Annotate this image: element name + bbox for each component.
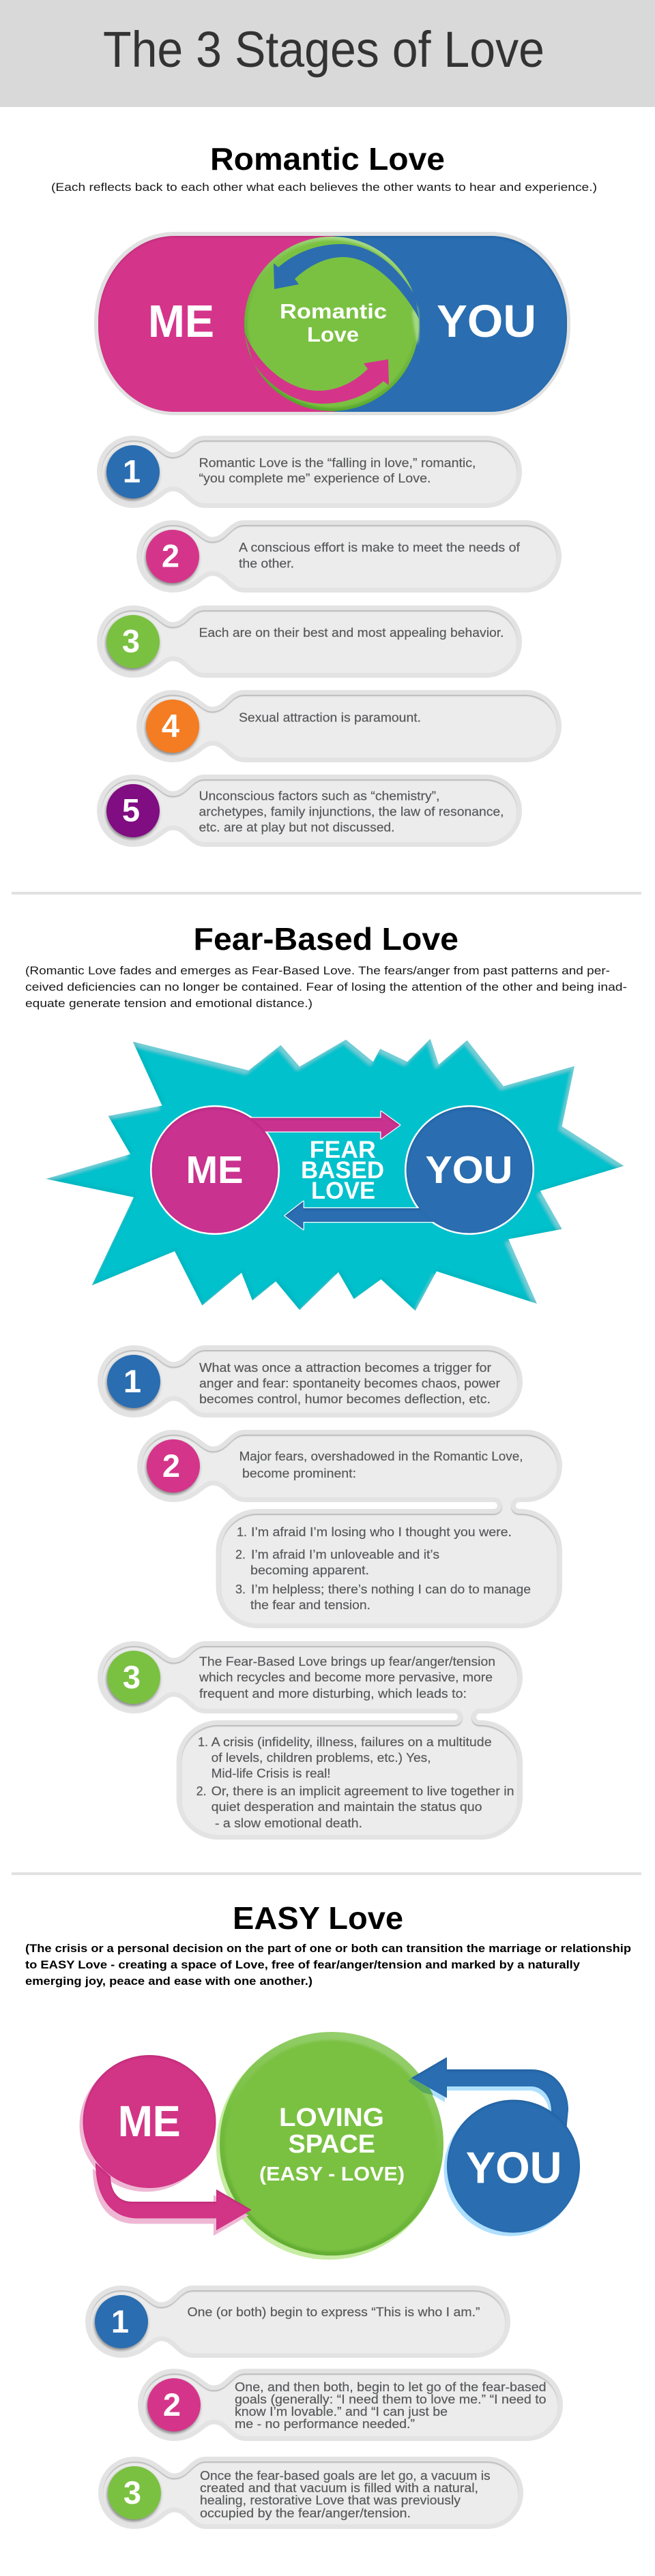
numbered list of outcomes: of levels, children problems, etc.) Yes, (212, 1751, 431, 1765)
item 4: Romantic Love: 4 (162, 708, 179, 743)
item 2: EASY Love: 2 (163, 2386, 181, 2423)
numbered list of fears: becoming apparent. (250, 1563, 369, 1577)
item 3: EASY Love: healing, restorative Love that was previously (200, 2493, 461, 2507)
circle and arrow: ME (79, 2055, 252, 2236)
item 1: EASY Love: One (or both) begin to express “This is who I am.” (187, 2305, 480, 2319)
item 1: Fear-Based Love: becomes control, humor becomes deflection, etc. (199, 1392, 491, 1406)
item 1: Romantic Love: 1 (123, 453, 141, 490)
arrow: pink curved (244, 331, 389, 404)
arrow: me to you (150, 1105, 400, 1235)
item 3: EASY Love: 3 (123, 2474, 141, 2511)
subtitle: Fear-Based Love (25, 964, 627, 1010)
item 3: Fear-Based Love with list: The Fear-Based Love brings up fear/anger/tension (199, 1655, 495, 1668)
item 5: Romantic Love: 5 (122, 792, 140, 828)
circle: loving space (216, 2032, 443, 2260)
diagram: Fear-Based starburst (46, 1039, 624, 1311)
item 3: EASY Love: occupied by the fear/anger/tension. (200, 2506, 411, 2520)
subtitle: EASY Love: to EASY Love - creating a space of Love, free of fear/anger/tension and marked by a naturally (25, 1958, 581, 1971)
numbered list of fears: I’m afraid I’m losing who I thought you were. (251, 1525, 512, 1539)
item 3: Romantic Love (102, 610, 517, 673)
label: Romantic Love centre: Romantic (280, 299, 387, 323)
item 2: Fear-Based Love with list: Major fears, overshadowed in the Romantic Love, (239, 1450, 523, 1463)
item 1: EASY Love: 1 (111, 2303, 129, 2339)
numbered list of outcomes: 2. (196, 1784, 207, 1798)
item 3: Fear-Based Love with list: 3 (123, 1659, 141, 1695)
item 1: Fear-Based Love: anger and fear: spontaneity becomes chaos, power (199, 1377, 500, 1390)
label: Romantic Love centre (280, 299, 387, 346)
item 1: Fear-Based Love: 1 (123, 1363, 141, 1399)
numbered list of fears: 2. (235, 1548, 246, 1561)
item 4: Romantic Love: Sexual attraction is paramount. (239, 710, 421, 724)
numbered list of fears (235, 1525, 531, 1612)
numbered list of outcomes: quiet desperation and maintain the status quo (212, 1800, 482, 1814)
circle and arrow: ME: ME (118, 2097, 181, 2146)
arrow: you to me (285, 1105, 534, 1235)
numbered list of outcomes: Mid-life Crisis is real! (212, 1767, 331, 1780)
label: Fear Based Love: BASED (301, 1157, 384, 1184)
numbered list of fears: 3. (235, 1583, 246, 1596)
item 2: Fear-Based Love with list: become prominent: (242, 1467, 356, 1480)
item 2: EASY Love: me - no performance needed.” (235, 2417, 415, 2431)
pill background: me and you halves (98, 236, 567, 412)
subtitle: Fear-Based Love: (Romantic Love fades and emerges as Fear-Based Love. The fears/anger from past patterns and per- (25, 964, 610, 977)
label: YOU: YOU (437, 296, 536, 347)
numbered list of outcomes (196, 1735, 514, 1830)
item 3: EASY Love: Once the fear-based goals are let go, a vacuum is (200, 2469, 491, 2483)
green centre circle (244, 237, 420, 411)
subtitle: Romantic Love: (Each reflects back to each other what each believes the other wants to hear and experience.) (51, 181, 597, 194)
item 2: Fear-Based Love with list: 2 (162, 1448, 180, 1484)
numbered list of outcomes: 1. (198, 1735, 208, 1749)
circle: loving space: SPACE (288, 2130, 375, 2159)
item 1: Romantic Love: “you complete me” experience of Love. (199, 472, 431, 485)
circle: YOU (407, 1107, 532, 1233)
item 5: Romantic Love: archetypes, family injunctions, the law of resonance, (199, 805, 504, 819)
item 2: Romantic Love: 2 (162, 537, 179, 574)
item 5: Romantic Love: etc. are at play but not discussed. (199, 821, 394, 835)
numbered list of fears: I’m helpless; there’s nothing I can do to manage (251, 1583, 531, 1596)
subtitle: Fear-Based Love: ceived deficiencies can no longer be contained. Fear of losing the attention of the other and being inad- (25, 980, 627, 993)
diagram: Romantic Love pill (94, 232, 570, 415)
item 1: EASY Love (90, 2290, 506, 2353)
title banner (0, 0, 655, 107)
subtitle: EASY Love (25, 1942, 631, 1988)
item 3: Fear-Based Love with list (102, 1646, 518, 1835)
item 1: Romantic Love: Romantic Love is the “falling in love,” romantic, (199, 456, 476, 470)
circle and arrow: YOU: YOU (466, 2143, 562, 2193)
label: Fear Based Love (301, 1137, 384, 1204)
item 2: Romantic Love (141, 525, 557, 588)
circle: loving space: LOVING (279, 2103, 384, 2132)
circle: ME (151, 1107, 278, 1233)
item 2: EASY Love: know I’m lovable.” and “I can just be (235, 2405, 448, 2418)
item 2: EASY Love: One, and then both, begin to let go of the fear-based (235, 2380, 547, 2394)
title banner: The 3 Stages of Love (103, 21, 544, 78)
label: ME: ME (148, 296, 214, 347)
numbered list of outcomes: A crisis (infidelity, illness, failures on a multitude (212, 1735, 492, 1749)
item 3: Romantic Love: 3 (122, 623, 140, 659)
heading: Fear-Based Love: Fear-Based Love (194, 921, 458, 957)
item 3: Romantic Love: Each are on their best and most appealing behavior. (199, 626, 504, 640)
item 5: Romantic Love (102, 779, 517, 842)
subtitle: EASY Love: (The crisis or a personal decision on the part of one or both can transition the marriage or relationship (25, 1942, 631, 1955)
item 3: Fear-Based Love with list: which recycles and become more pervasive, more (199, 1671, 493, 1684)
item 5: Romantic Love: Unconscious factors such as “chemistry”, (199, 790, 439, 803)
subtitle: Fear-Based Love: equate generate tension and emotional distance.) (25, 997, 312, 1010)
item 3: EASY Love: created and that vacuum is filled with a natural, (200, 2481, 478, 2495)
item 2: EASY Love: goals (generally: “I need them to love me.” “I need to (235, 2393, 547, 2406)
item 3: Fear-Based Love with list: frequent and more disturbing, which leads to: (199, 1687, 467, 1701)
item 1: Fear-Based Love: What was once a attraction becomes a trigger for (199, 1361, 491, 1375)
circle: ME: ME (186, 1148, 243, 1192)
item 1: Romantic Love (102, 440, 517, 503)
label: Romantic Love centre: Love (307, 323, 359, 346)
numbered list of fears: I’m afraid I’m unloveable and it’s (251, 1548, 439, 1561)
numbered list of fears: the fear and tension. (250, 1598, 370, 1612)
numbered list of fears: 1. (237, 1525, 247, 1539)
subtitle: EASY Love: emerging joy, peace and ease with one another.) (25, 1975, 312, 1988)
arrow: blue curved (274, 244, 419, 319)
heading: Romantic Love: Romantic Love (210, 141, 445, 177)
numbered list of outcomes: Or, there is an implicit agreement to live together in (212, 1784, 514, 1798)
item 1: Fear-Based Love (102, 1350, 518, 1413)
starburst shape (46, 1039, 624, 1311)
label: Fear Based Love: FEAR (310, 1137, 376, 1163)
item 3: EASY Love (103, 2461, 519, 2524)
diagram: Loving Space (79, 2032, 580, 2260)
item 2: Romantic Love: A conscious effort is make to meet the needs of (239, 541, 521, 554)
label: Fear Based Love: LOVE (311, 1178, 375, 1204)
item 2: EASY Love (143, 2373, 558, 2436)
item 2: Romantic Love: the other. (239, 556, 294, 570)
heading: EASY Love: EASY Love (233, 1900, 403, 1936)
circle: YOU: YOU (425, 1148, 512, 1192)
item 2: Fear-Based Love with list (142, 1435, 557, 1623)
circle and arrow: YOU (408, 2057, 580, 2236)
item 4: Romantic Love (141, 695, 557, 758)
circle: loving space: (EASY - LOVE) (259, 2163, 405, 2185)
numbered list of outcomes: - a slow emotional death. (215, 1816, 362, 1830)
